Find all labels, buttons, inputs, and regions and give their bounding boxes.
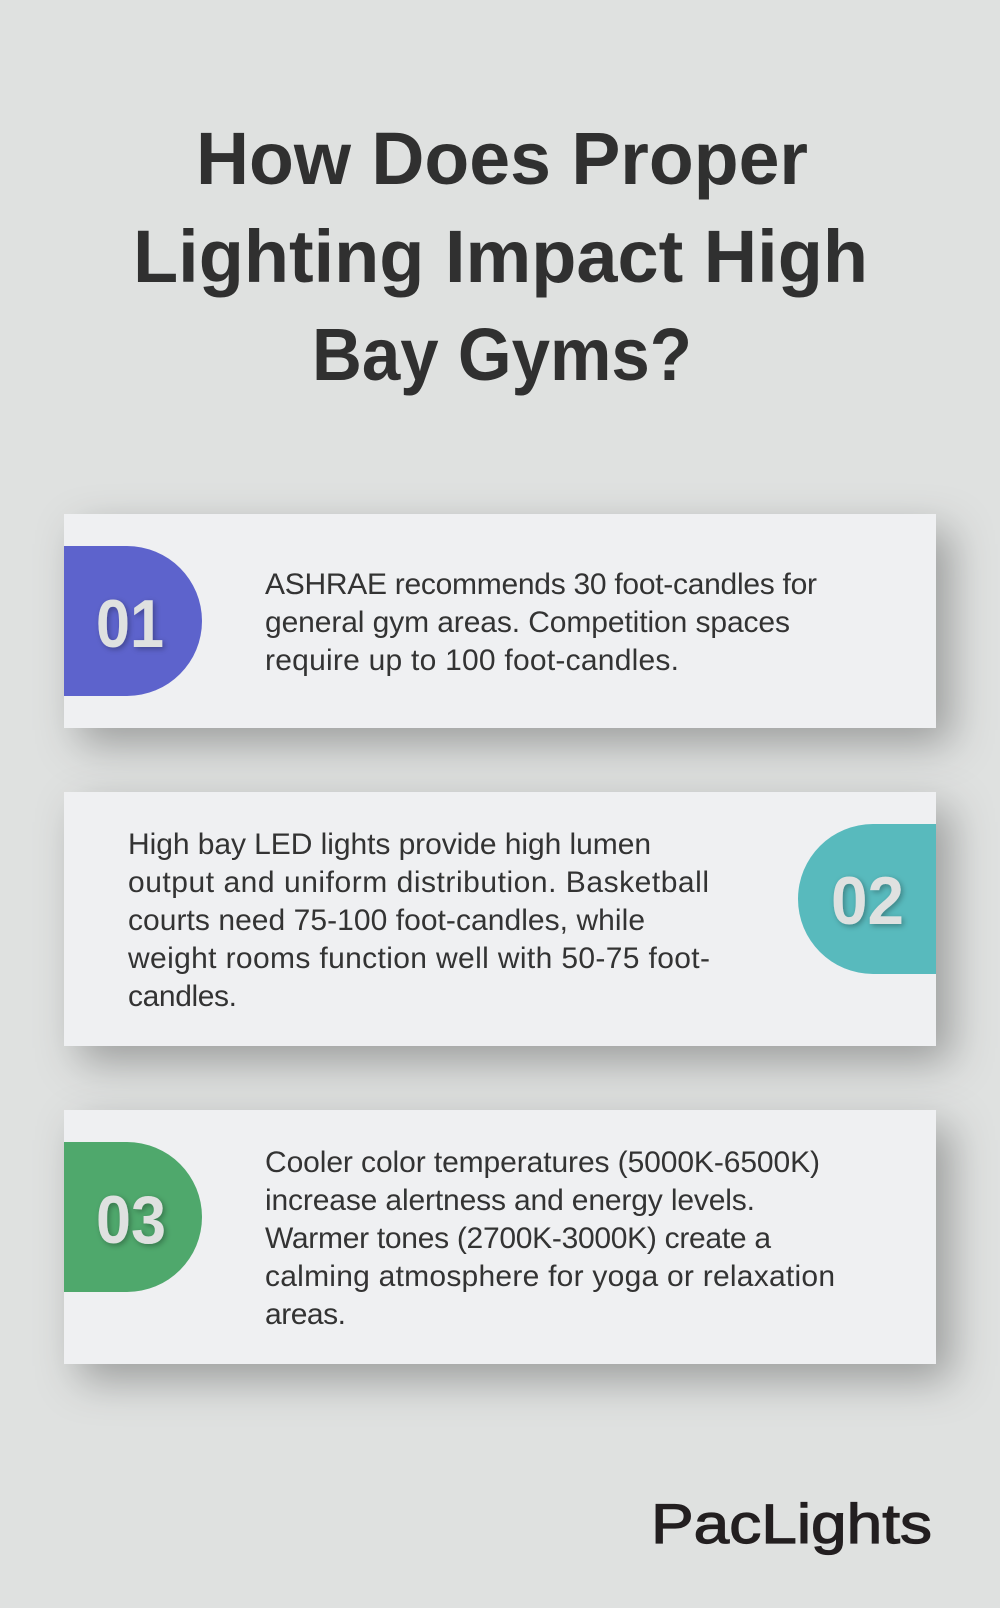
panel: step 01 xyxy=(64,514,936,728)
text block 03: areas. xyxy=(265,1298,346,1331)
panel: step 03 xyxy=(64,1110,936,1364)
text block 02: courts need 75-100 foot-candles, while xyxy=(128,904,645,937)
badge 01 xyxy=(64,546,202,696)
text block 03: increase alertness and energy levels. xyxy=(265,1184,755,1217)
card background 01 xyxy=(64,514,936,728)
text block 03: Cooler color temperatures (5000K-6500K) xyxy=(265,1146,820,1179)
text block 02: output and uniform distribution. Basketball xyxy=(128,866,709,899)
text block 03: calming atmosphere for yoga or relaxation xyxy=(265,1260,835,1293)
badge 03: 03 xyxy=(96,1182,166,1258)
title xyxy=(133,117,868,396)
text block 02: candles. xyxy=(128,980,237,1013)
text block 01: general gym areas. Competition spaces xyxy=(265,606,790,639)
text block 01 xyxy=(265,568,817,677)
title: How Does Proper xyxy=(196,117,808,200)
card background 03 xyxy=(64,1110,936,1364)
text block 01: require up to 100 foot-candles. xyxy=(265,644,679,677)
text block 03 xyxy=(265,1146,835,1331)
card background 02 xyxy=(64,792,936,1046)
panel: step 02 xyxy=(64,792,936,1046)
text block 02 xyxy=(127,828,710,1013)
badge 01: 01 xyxy=(96,586,164,662)
text block 02: weight rooms function well with 50-75 foot- xyxy=(127,942,710,975)
badge 02 xyxy=(798,824,936,974)
logo: PacLights: PacLights xyxy=(651,1492,932,1555)
badge 02: 02 xyxy=(831,863,904,939)
title: Lighting Impact High xyxy=(133,215,868,298)
text block 01: ASHRAE recommends 30 foot-candles for xyxy=(265,568,817,601)
text block 03: Warmer tones (2700K-3000K) create a xyxy=(265,1222,771,1255)
title: Bay Gyms? xyxy=(312,313,692,396)
text block 02: High bay LED lights provide high lumen xyxy=(128,828,651,861)
badge 03 xyxy=(64,1142,202,1292)
